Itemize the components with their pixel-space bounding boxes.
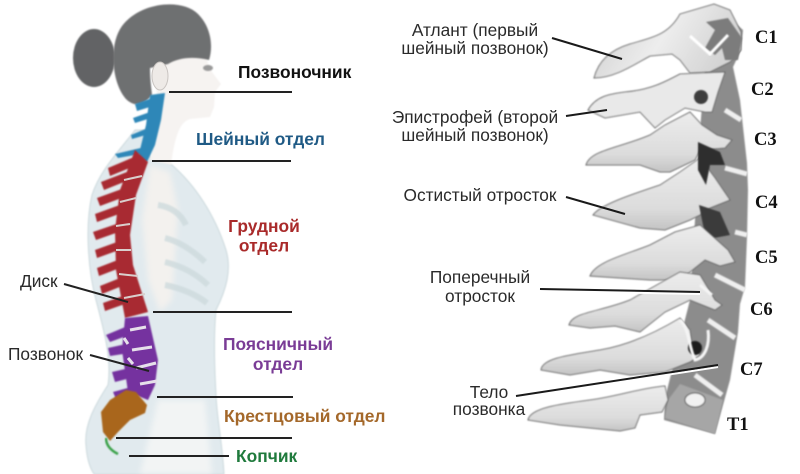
ear <box>152 62 168 90</box>
spine: coccyx <box>106 438 118 454</box>
hair bun <box>73 29 115 87</box>
label: Эпистрофей: шейный позвонок) <box>401 125 549 145</box>
process C4 <box>593 158 730 230</box>
label: Позвонок: Позвонок <box>8 344 84 364</box>
label: Крестцовый отдел: Крестцовый отдел <box>224 406 385 426</box>
label: Шейный отдел: Шейный отдел <box>196 129 325 149</box>
vertebral column <box>664 12 748 434</box>
spine: lumbar <box>106 316 158 400</box>
process T1 <box>528 386 668 431</box>
label: Эпистрофей: Эпистрофей (второй <box>392 107 558 127</box>
vertebra labels: C7 <box>740 360 763 380</box>
vertebra labels: C3 <box>754 130 777 150</box>
spine: thoracic <box>93 150 148 318</box>
process C1 <box>594 4 741 78</box>
label: Остистый отросток: Остистый отросток <box>404 185 557 205</box>
torso <box>86 130 228 474</box>
eye <box>203 65 213 71</box>
label: Копчик: Копчик <box>236 446 298 466</box>
process C2 <box>588 72 725 128</box>
mouth <box>193 95 214 97</box>
label: Грудной отдел: отдел <box>239 236 289 256</box>
vertebra labels: C6 <box>750 300 773 320</box>
vertebra labels: C1 <box>755 28 778 48</box>
hair <box>113 4 211 104</box>
process C6 <box>569 272 722 332</box>
pelvis <box>140 400 212 474</box>
vertebra labels <box>727 28 778 435</box>
label: Диск: Диск <box>20 271 58 291</box>
white discs <box>695 110 747 395</box>
vertebra labels: C2 <box>751 80 774 100</box>
spine: thoracic discs <box>116 176 145 298</box>
white highlights <box>680 285 712 360</box>
neck and face <box>150 54 221 165</box>
leader lines: spine sections <box>64 92 293 456</box>
label: Поясничный отдел: отдел <box>253 354 303 374</box>
spine: sacrum <box>101 390 147 441</box>
label: Тело позвонка: позвонка <box>453 399 526 419</box>
spine: cervical <box>115 93 165 162</box>
label: Тело позвонка: Тело <box>470 382 508 402</box>
leader lines: neck <box>516 38 718 398</box>
label: Поясничный отдел: Поясничный <box>223 334 333 354</box>
dark joint <box>698 142 725 185</box>
process C7 <box>541 318 700 375</box>
process C5 <box>590 225 735 280</box>
vertebra labels: T1 <box>727 415 749 435</box>
chest highlight <box>142 165 178 312</box>
vertebra labels: C5 <box>755 248 778 268</box>
label: Поперечный отросток: Поперечный <box>430 267 530 287</box>
C7–T1 body <box>665 384 723 434</box>
lumbar gaps <box>124 327 157 384</box>
label: Атлант: Атлант (первый <box>412 20 538 40</box>
label: Грудной отдел: Грудной <box>228 216 300 236</box>
label: Позвоночник: Позвоночник <box>238 62 352 82</box>
vertebra labels: C4 <box>755 193 778 213</box>
illustration: female figure with spine <box>73 4 228 474</box>
process C3 <box>586 112 732 172</box>
T1 foramen <box>685 393 705 407</box>
label: Поперечный отросток: отросток <box>445 286 515 306</box>
ribs <box>158 205 208 303</box>
illustration: cervical vertebrae <box>528 4 748 434</box>
label: Атлант: шейный позвонок) <box>401 38 549 58</box>
